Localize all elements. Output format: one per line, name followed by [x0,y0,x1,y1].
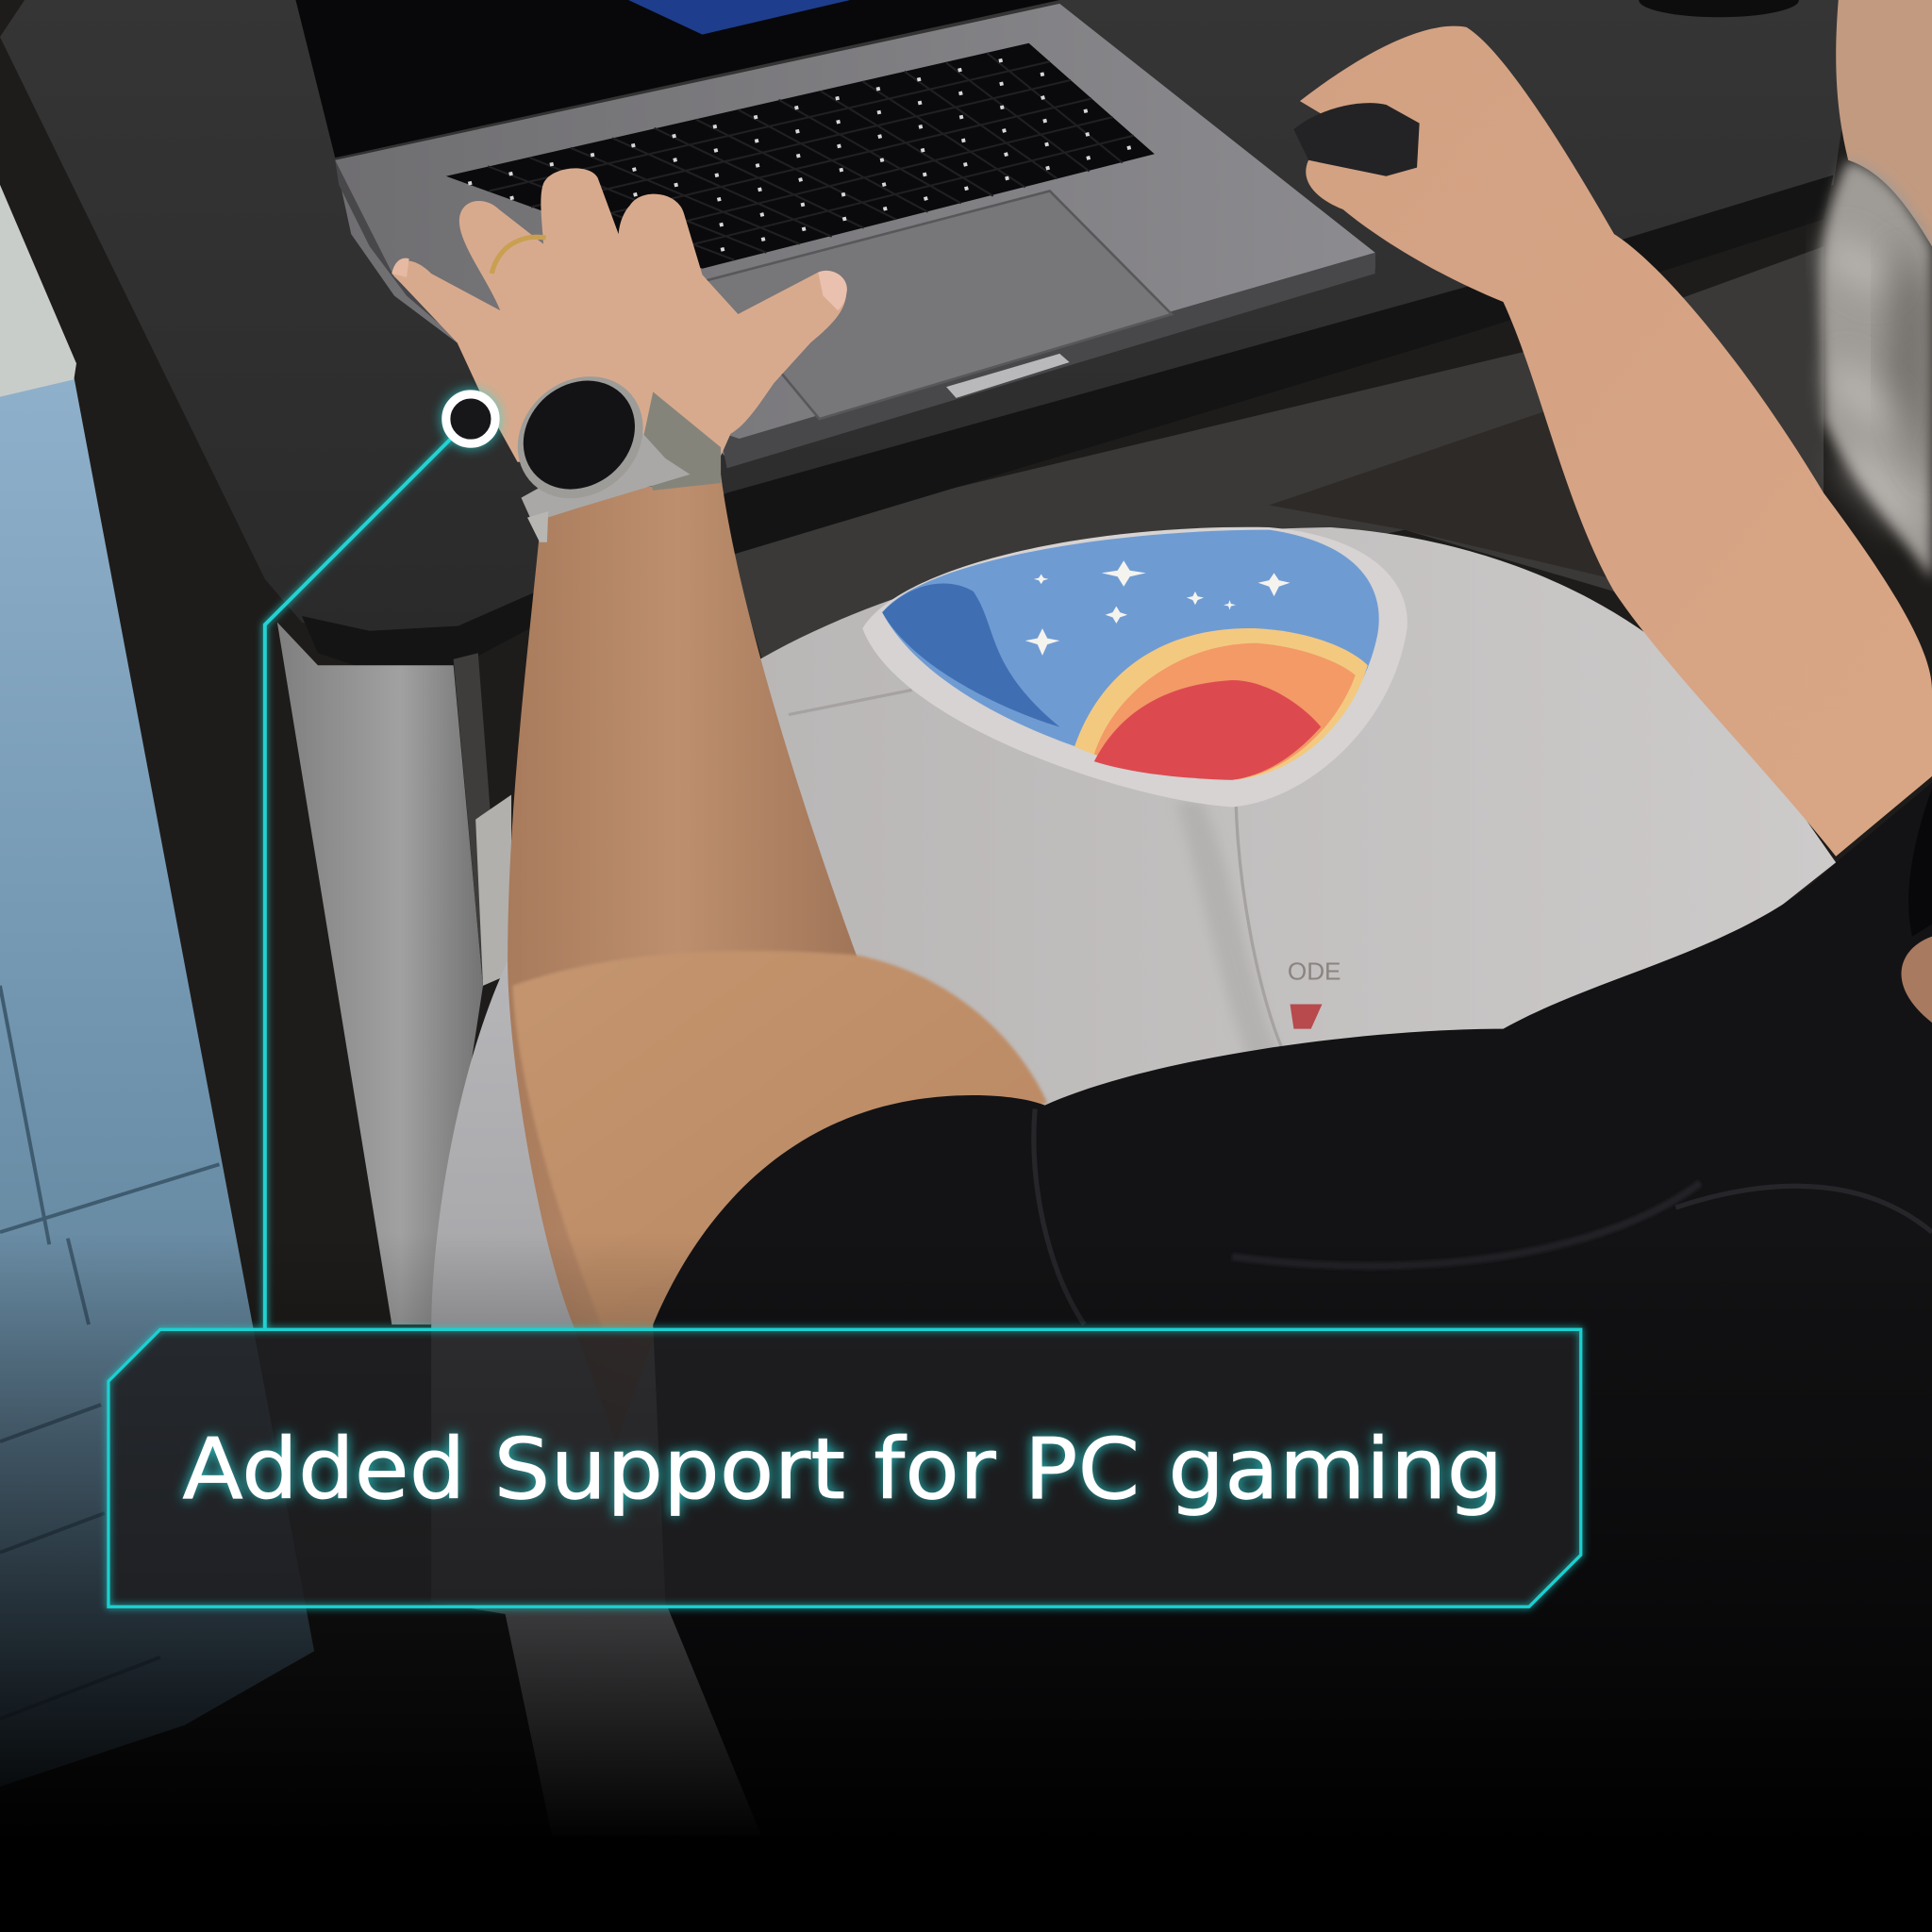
bottom dark gradient [0,1232,1932,1848]
connector line [265,438,452,1329]
laptop [295,0,1375,468]
t-shirt pillow [740,527,1836,1171]
grey trousers leg [431,961,789,1848]
right hand and arm [1300,26,1932,857]
desk top [0,0,1860,671]
callout text: Added Support for PC gaming [182,1421,1503,1518]
desk leg [277,623,483,1324]
t-shirt pillow: ODE [1288,957,1341,985]
filing cabinet [0,185,314,1787]
beard [1820,160,1932,579]
icon: stars [1025,560,1291,656]
black t-shirt [653,782,1932,1932]
keyboard [446,43,1155,269]
object top right [1639,0,1799,17]
cheek [1836,0,1932,246]
smartwatch [493,351,721,542]
trackpad [705,191,1172,419]
elbow [512,951,1047,1331]
laptop screen [295,0,1059,158]
left hand [391,168,847,462]
callout marker [442,391,499,447]
left forearm [508,475,887,1441]
callout panel [108,1329,1581,1607]
icon: planet print on shirt [862,527,1407,808]
mouse [1293,103,1420,176]
laptop base [335,4,1375,458]
